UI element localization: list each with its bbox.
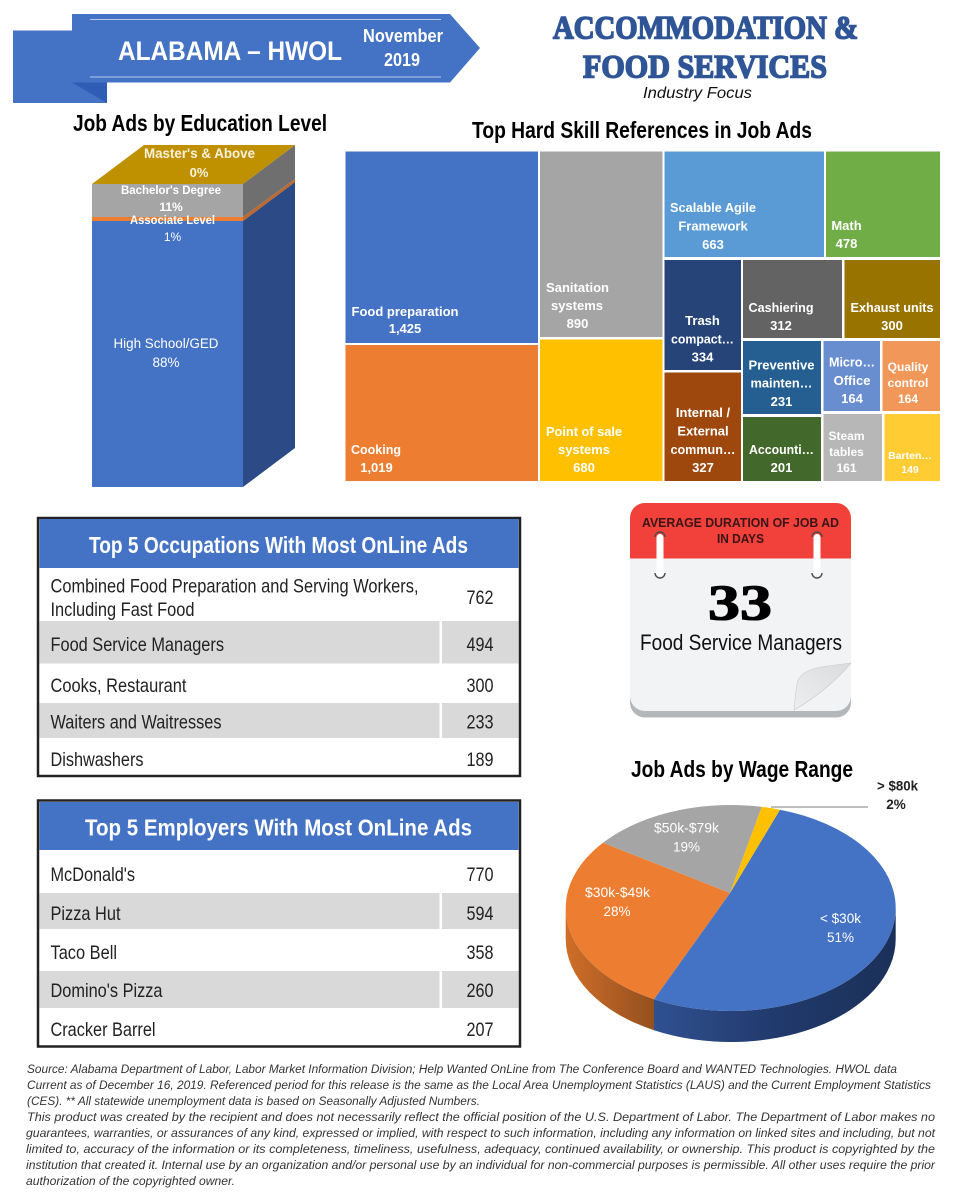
label: high school xyxy=(114,336,219,370)
row 4: 260 xyxy=(466,980,494,1002)
tile: internal external: 327 xyxy=(692,460,714,475)
tile: quality control xyxy=(882,341,940,411)
label: 30k-49k xyxy=(585,885,650,919)
label: under 30k: < $30k xyxy=(820,911,861,926)
tile: food preparation: Food preparation xyxy=(352,304,459,319)
tile: accounting: 201 xyxy=(771,460,792,475)
row 1 xyxy=(50,864,494,886)
row 1: Including Fast Food xyxy=(50,599,194,621)
footer source and disclaimer: authorization of the copyrighted owner. xyxy=(26,1176,235,1188)
duration value: 33 xyxy=(708,574,772,630)
calendar card xyxy=(630,503,851,718)
row 5: 207 xyxy=(466,1019,494,1041)
calendar rings xyxy=(655,532,822,578)
tile: cashiering: 312 xyxy=(770,318,792,333)
tile: internal external: commun… xyxy=(670,442,736,457)
row 2 xyxy=(50,903,494,925)
tile: exhaust units xyxy=(844,260,940,338)
calendar heading: AVERAGE DURATION OF JOB AD xyxy=(642,516,839,530)
row 4 xyxy=(50,980,494,1002)
3D pie chart: wage range xyxy=(566,778,918,1042)
tile: food preparation: 1,425 xyxy=(389,321,421,336)
row 5 xyxy=(50,749,494,771)
tile: steam tables: 161 xyxy=(836,461,857,475)
label: bachelors xyxy=(121,183,221,214)
footer source and disclaimer: limited to, accuracy of the information or its completeness, timeliness, usefulness, adequacy, continued availability, or ownership. This product is copyrighted by the xyxy=(26,1144,935,1156)
tile: exhaust units: Exhaust units xyxy=(850,300,934,315)
row 4: 233 xyxy=(466,712,494,734)
subtitle: Industry Focus xyxy=(643,85,752,102)
tile: point of sale: Point of sale xyxy=(546,424,622,439)
calendar heading xyxy=(642,516,839,546)
footer source and disclaimer: This product was created by the recipient and does not necessarily reflect the official position of the U.S. Department of Labor. The Department of Labor makes no xyxy=(27,1112,936,1124)
tile: accounting: Accounti… xyxy=(749,442,814,457)
row 1: Combined Food Preparation and Serving Workers, xyxy=(50,576,418,598)
row 2: Food Service Managers xyxy=(50,634,224,656)
label: bachelors: Bachelor's Degree xyxy=(121,183,221,197)
tile: bartending: Barten… xyxy=(888,450,932,462)
industry title: ACCOMMODATION & xyxy=(553,10,858,46)
tile: microsoft office: Micro… xyxy=(829,354,875,370)
tile: point of sale xyxy=(540,340,662,481)
banner ribbon xyxy=(13,14,480,103)
tile: cooking: Cooking xyxy=(351,442,401,457)
label: 50k-79k: 19% xyxy=(673,840,700,854)
tile: cooking xyxy=(346,345,538,481)
tile: quality control: 164 xyxy=(898,392,918,406)
heading: education: Job Ads by Education Level xyxy=(73,110,327,136)
row 3: 358 xyxy=(466,942,494,964)
tile: point of sale: systems xyxy=(558,442,610,457)
row 3 xyxy=(50,942,494,964)
tile: cashiering: Cashiering xyxy=(748,300,814,315)
tile: steam tables: Steam xyxy=(828,429,865,443)
tile: steam tables: tables xyxy=(829,445,864,459)
tile: preventive maintenance: Preventive xyxy=(748,358,814,372)
tile: math xyxy=(826,152,940,257)
3D stacked bar: education level xyxy=(92,145,295,487)
calendar heading: IN DAYS xyxy=(717,532,764,546)
footer source and disclaimer: guarantees, warranties, or assurances of any kind, expressed or implied, with respect to such information, including any information on linked sites and including, but not xyxy=(26,1128,936,1140)
footer source and disclaimer: Source: Alabama Department of Labor, Labor Market Information Division; Help Wanted OnLine from The Conference Board and WANTED Technologies. HWOL data xyxy=(27,1064,897,1076)
tile: cashiering xyxy=(743,260,842,338)
tile: internal external: Internal / xyxy=(676,405,730,420)
tile: microsoft office xyxy=(824,341,880,411)
tile: internal external xyxy=(664,372,741,481)
pie side walls xyxy=(566,908,896,1042)
banner date: November xyxy=(363,26,443,46)
slice: 50k-79k xyxy=(603,805,762,893)
slice: over 80k xyxy=(730,807,780,893)
tile: sanitation systems xyxy=(540,152,662,337)
row 2: 494 xyxy=(466,634,494,656)
table heading: Top 5 Occupations With Most OnLine Ads xyxy=(89,532,468,558)
row 2 xyxy=(50,634,494,656)
row 1: 762 xyxy=(466,587,494,609)
page curl xyxy=(794,663,851,710)
row 5: Dishwashers xyxy=(50,749,144,771)
banner date xyxy=(363,26,443,70)
row 1: McDonald's xyxy=(50,864,135,886)
label: masters xyxy=(144,146,255,180)
row 5: 189 xyxy=(466,749,494,771)
tile: math: Math xyxy=(831,218,862,233)
treemap: hard skills xyxy=(346,152,940,481)
banner title: ALABAMA – HWOL xyxy=(118,36,342,66)
tile: bartending: 149 xyxy=(901,464,919,476)
tile: trash compactor: Trash xyxy=(685,313,720,328)
row 3 xyxy=(50,675,494,697)
label: 50k-79k: $50k-$79k xyxy=(654,820,719,836)
label: under 30k: 51% xyxy=(827,930,854,945)
label: over 80k xyxy=(877,778,918,812)
label: 50k-79k xyxy=(654,820,719,854)
tile: preventive maintenance xyxy=(743,341,821,414)
tile: trash compactor xyxy=(664,260,741,370)
table: top 5 occupations xyxy=(38,518,520,776)
tile: sanitation systems: systems xyxy=(551,298,603,313)
tile: food preparation xyxy=(346,152,538,343)
tile: trash compactor: compact… xyxy=(671,332,734,346)
tile: scalable agile: Scalable Agile xyxy=(670,200,756,215)
tile: sanitation systems: 890 xyxy=(567,316,588,331)
tile: math: 478 xyxy=(836,236,857,251)
label: high school: High School/GED xyxy=(114,336,219,351)
tile: quality control: Quality xyxy=(888,360,929,374)
slice: under 30k xyxy=(654,810,896,1011)
industry title: FOOD SERVICES xyxy=(583,50,827,86)
tile: preventive maintenance: mainten… xyxy=(750,376,812,390)
industry title xyxy=(553,10,858,102)
heading: wage range: Job Ads by Wage Range xyxy=(631,756,853,782)
banner date: 2019 xyxy=(384,50,420,70)
tile: sanitation systems: Sanitation xyxy=(546,280,609,295)
label: high school: 88% xyxy=(152,355,180,370)
occupation label: Food Service Managers xyxy=(640,630,842,655)
tile: bartending xyxy=(884,414,940,481)
label: masters: 0% xyxy=(190,165,209,180)
tile: scalable agile xyxy=(664,152,824,257)
label: 30k-49k: 28% xyxy=(603,904,631,919)
row 4 xyxy=(50,712,494,734)
label: under 30k xyxy=(820,911,861,945)
table: top 5 employers xyxy=(38,800,520,1046)
tile: exhaust units: 300 xyxy=(881,318,903,333)
tile: accounting xyxy=(743,417,821,481)
row 5 xyxy=(50,1019,494,1041)
tile: internal external: External xyxy=(677,424,729,438)
row 2: 594 xyxy=(466,903,494,925)
row 4: Domino's Pizza xyxy=(50,980,163,1002)
label: associate xyxy=(130,213,215,244)
leader line xyxy=(771,806,868,808)
row 4: Waiters and Waitresses xyxy=(50,712,222,734)
heading: hard skills: Top Hard Skill References in Job Ads xyxy=(472,117,812,143)
label: over 80k: 2% xyxy=(886,797,906,812)
footer source and disclaimer: institution that created it. Internal use by an organization and/or personal use by an individual for non-commercial purposes is permissible. All other uses require the prior xyxy=(26,1160,936,1172)
label: bachelors: 11% xyxy=(159,200,183,214)
tile: quality control: control xyxy=(888,376,928,390)
label: masters: Master's & Above xyxy=(144,146,255,161)
row 2: Pizza Hut xyxy=(50,903,121,925)
tile: cooking: 1,019 xyxy=(360,460,393,475)
tile: trash compactor: 334 xyxy=(692,350,714,364)
row 1: 770 xyxy=(466,864,494,886)
row 3: 300 xyxy=(466,675,494,697)
tile: scalable agile: 663 xyxy=(702,237,724,252)
label: 30k-49k: $30k-$49k xyxy=(585,885,650,900)
tile: steam tables xyxy=(824,414,882,481)
tile: microsoft office: 164 xyxy=(841,391,864,406)
label: associate: Associate Level xyxy=(130,213,215,227)
row 1 xyxy=(50,576,494,621)
tile: scalable agile: Framework xyxy=(678,218,748,234)
table heading: Top 5 Employers With Most OnLine Ads xyxy=(85,814,472,840)
footer source and disclaimer: Current as of December 16, 2019. Referenced period for this release is the same as the Local Area Unemployment Statistics (LAUS) and the Current Employment Statistics xyxy=(27,1080,931,1092)
row 5: Cracker Barrel xyxy=(50,1019,156,1041)
tile: microsoft office: Office xyxy=(834,373,870,388)
row 3: Cooks, Restaurant xyxy=(50,675,187,697)
tile: point of sale: 680 xyxy=(573,460,595,475)
label: over 80k: > $80k xyxy=(877,778,918,794)
label: associate: 1% xyxy=(164,230,182,244)
footer source and disclaimer xyxy=(26,1064,936,1188)
footer source and disclaimer: (CES). ** All statewide unemployment data is based on Seasonally Adjusted Numbers. xyxy=(27,1096,480,1108)
slice: 30k-49k xyxy=(566,843,730,999)
tile: preventive maintenance: 231 xyxy=(771,394,792,409)
row 3: Taco Bell xyxy=(50,942,117,964)
